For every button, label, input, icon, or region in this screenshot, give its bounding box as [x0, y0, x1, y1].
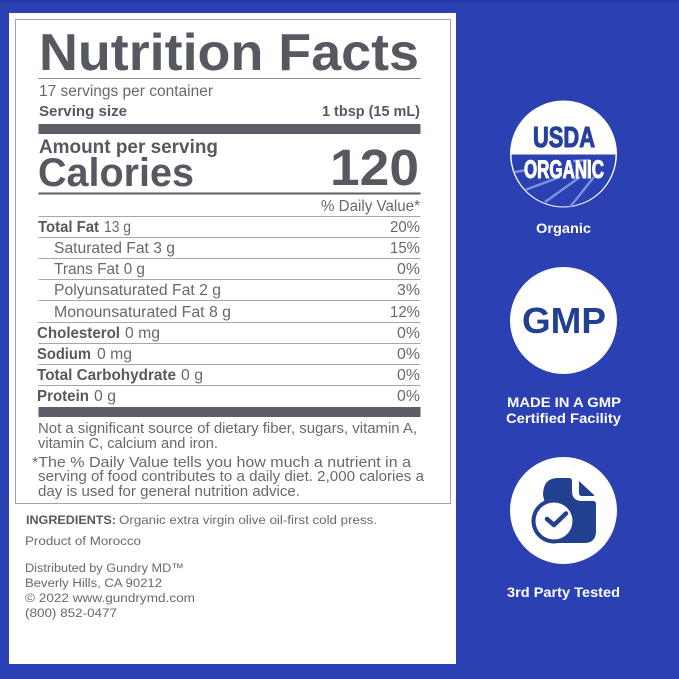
nutrient table: Saturated Fat 3 g [54, 240, 175, 257]
distributor details: Distributed by Gundry MD™ [25, 561, 184, 575]
calories block [38, 137, 419, 196]
distributor details [25, 561, 195, 620]
nutrient table: Trans Fat 0 g [54, 261, 145, 278]
nutrient table: 15% [390, 240, 420, 257]
nutrient table: Cholesterol [37, 325, 120, 342]
servings block: Serving size [39, 103, 127, 120]
nutrient table: 0% [397, 346, 420, 363]
footnote: daily value explanation [32, 455, 425, 500]
icon: third party tested document badge [510, 457, 617, 564]
ingredients [26, 513, 377, 527]
heading: Nutrition Facts: Nutrition Facts [39, 24, 419, 82]
distributor details: Beverly Hills, CA 90212 [25, 576, 162, 590]
servings block: 17 servings per container [39, 83, 213, 100]
nutrient table: 3% [397, 282, 420, 299]
label: made in a GMP certified facility: Certified Facility [506, 410, 621, 426]
servings block: 1 tbsp (15 mL) [322, 103, 420, 120]
nutrient table: Total Fat [38, 219, 99, 236]
nutrient table: 0% [397, 388, 420, 405]
label: made in a GMP certified facility [506, 394, 621, 426]
calories block: Calories [38, 151, 194, 195]
distributor details: © 2022 www.gundrymd.com [25, 591, 195, 605]
calories block: Amount per serving [39, 137, 218, 158]
footnote: daily value explanation: serving of food contributes to a daily diet. 2,000 calories a [38, 469, 425, 485]
label: made in a GMP certified facility: MADE IN A GMP [507, 394, 621, 410]
icon: USDA organic seal: USDA [533, 122, 595, 154]
daily value heading: % Daily Value* [321, 198, 420, 215]
icon: GMP badge: GMP [522, 300, 606, 341]
icon: GMP badge [510, 267, 617, 374]
icon: USDA organic seal [510, 100, 617, 208]
footnote: not a significant source [38, 421, 417, 452]
servings block [39, 83, 420, 120]
nutrient table: 0 g [94, 388, 116, 405]
nutrient table: Sodium [37, 346, 91, 363]
ingredients: Organic extra virgin olive oil-first cold press. [119, 513, 377, 527]
icon: USDA organic seal: ORGANIC [524, 156, 604, 184]
nutrient table: 13 g [104, 219, 131, 236]
nutrient table: 12% [390, 304, 420, 321]
distributor details: (800) 852-0477 [25, 606, 117, 620]
ingredients: INGREDIENTS: [26, 513, 116, 527]
label: 3rd Party Tested: 3rd Party Tested [507, 584, 620, 600]
nutrient table: Total Carbohydrate [37, 367, 176, 384]
footnote: not a significant source: vitamin C, calcium and iron. [38, 436, 218, 452]
nutrient table: 0% [397, 261, 420, 278]
nutrient table: 20% [390, 219, 420, 236]
nutrient table: 0 mg [97, 346, 132, 363]
origin: Product of Morocco [25, 534, 141, 548]
nutrient table: Protein [37, 388, 89, 405]
nutrient table: Monounsaturated Fat 8 g [54, 304, 231, 321]
panel: nutrition label sheet [9, 13, 456, 664]
footnote: daily value explanation: *The % Daily Value tells you how much a nutrient in a [32, 455, 412, 471]
nutrient table: 0 g [181, 367, 203, 384]
nutrient table: 0% [397, 325, 420, 342]
calories block: 120 [330, 139, 419, 196]
nutrient table: Polyunsaturated Fat 2 g [54, 282, 221, 299]
footnote: not a significant source: Not a significant source of dietary fiber, sugars, vitamin A, [38, 421, 417, 437]
nutrient table [37, 216, 420, 405]
nutrient table: 0 mg [125, 325, 160, 342]
nutrient table: 0% [397, 367, 420, 384]
label: Organic: Organic [536, 220, 591, 236]
footnote: daily value explanation: day is used for general nutrition advice. [38, 484, 300, 500]
